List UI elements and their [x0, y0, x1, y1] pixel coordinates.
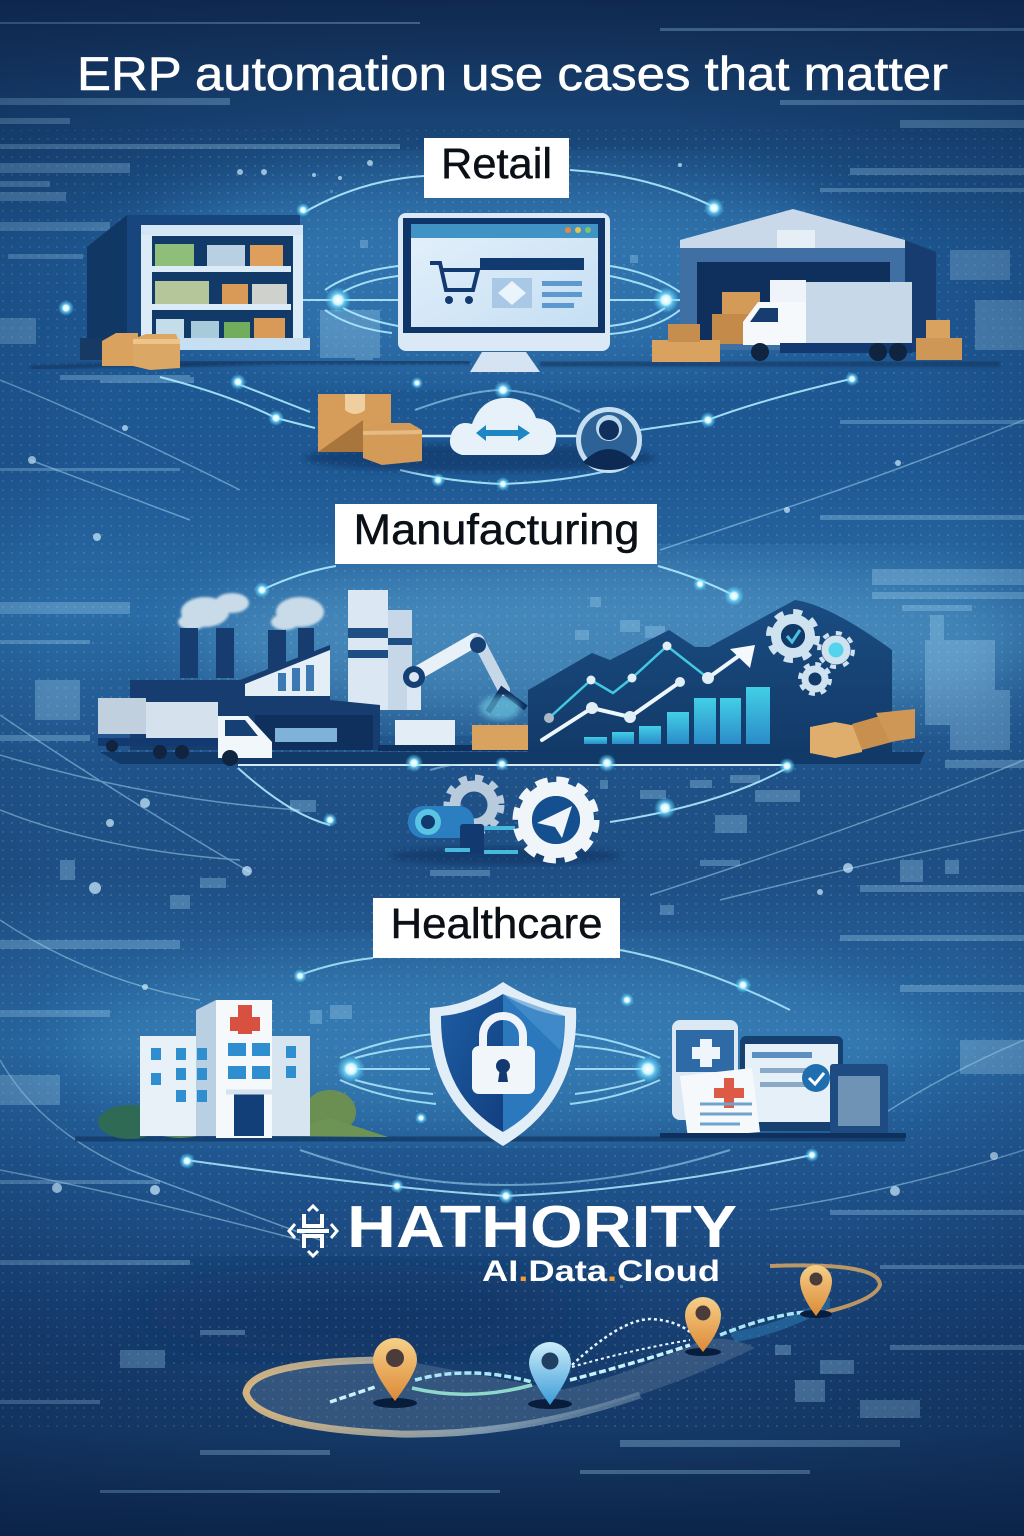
ground line: retail [30, 362, 1000, 368]
icon: monitor with shopping cart [398, 213, 610, 372]
icon: small gears [769, 612, 853, 694]
icon: boxes, cloud, user [305, 394, 655, 473]
heading: Manufacturing [335, 504, 657, 564]
heading: Retail: Retail [441, 140, 552, 188]
icon: logo mark [289, 1206, 337, 1256]
icon: factory with smoke [98, 590, 412, 766]
connector nodes: retail [58, 198, 859, 491]
ground line: manufacturing [100, 752, 925, 764]
section: retail [30, 138, 1000, 491]
heading: Manufacturing: Manufacturing [354, 506, 640, 554]
logo tagline: AI.Data .Cloud [482, 1255, 720, 1288]
icon: warehouse with truck [652, 209, 962, 362]
logo: Hathority [289, 1194, 737, 1288]
icon: gears and circuit [390, 778, 620, 865]
section: healthcare [75, 898, 906, 1204]
connector nodes: manufacturing [254, 577, 795, 827]
connector nodes: healthcare [179, 969, 819, 1204]
icon: security shield with lock [430, 982, 576, 1146]
route map with location pins [246, 1265, 880, 1434]
ground line: healthcare [75, 1136, 905, 1142]
pin 1 [373, 1338, 417, 1408]
icon: hospital [98, 1000, 388, 1139]
chart: bars with growth arrow [528, 600, 892, 752]
section: manufacturing [98, 504, 925, 865]
title: ERP automation use cases that matter [77, 47, 948, 100]
heading: Retail [424, 138, 569, 198]
icon: medical records [660, 1020, 906, 1138]
heading: Healthcare: Healthcare [390, 900, 602, 948]
pin 4 [800, 1265, 832, 1318]
heading: Healthcare [373, 898, 620, 958]
icon: boxes on ground [810, 709, 915, 758]
pin 2 [528, 1342, 572, 1409]
icon: robot arm [378, 637, 530, 751]
pin 3 [685, 1297, 721, 1356]
logo wordmark: HATHORITY [347, 1194, 737, 1260]
icon: store shelves [80, 215, 310, 370]
